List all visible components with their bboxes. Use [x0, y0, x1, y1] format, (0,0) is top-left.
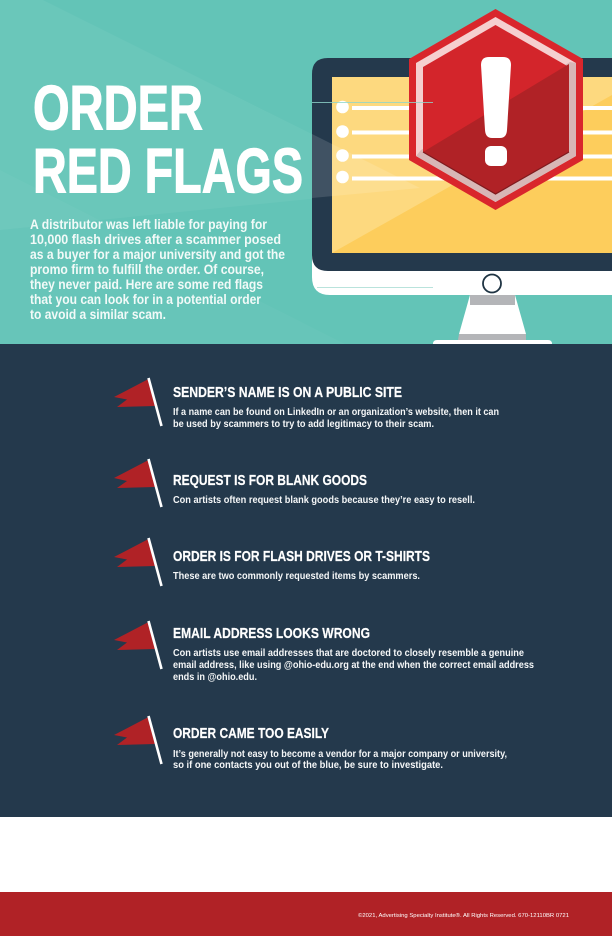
red flag item 2: [114, 459, 475, 507]
intro paragraph: they never paid. Here are some red flags: [30, 277, 263, 292]
body text: If a name can be found on LinkedIn or an organization’s website, then it can: [173, 407, 499, 418]
monitor power button: [483, 274, 501, 292]
footer copyright text: ©2021, Advertising Specialty Institute®. All Rights Reserved. 670-12110BR 0721: [358, 912, 569, 919]
heading: sender's name: SENDER’S NAME IS ON A PUBLIC SITE: [173, 385, 402, 401]
translucent light beam over monitor: [312, 134, 433, 288]
panel: teal hero background: [0, 0, 612, 344]
footer bar: [0, 892, 612, 936]
body text: It’s generally not easy to become a vendor for a major company or university,: [173, 749, 507, 760]
illustration: computer monitor: [312, 58, 612, 344]
intro paragraph: [30, 217, 285, 322]
icon: red flag: [114, 716, 162, 764]
white spacer band: [0, 817, 612, 892]
monitor screen: [332, 77, 612, 253]
intro paragraph: to avoid a similar scam.: [30, 307, 166, 322]
body text: email address, like using @ohio-edu.org at the end when the correct email address: [173, 660, 534, 671]
body text: [173, 749, 507, 771]
intro paragraph: promo firm to fulfill the order. Of course,: [30, 262, 264, 277]
icon: red flag: [114, 378, 162, 426]
monitor stand: [433, 295, 552, 344]
heading: flash drives: ORDER IS FOR FLASH DRIVES OR T-SHIRTS: [173, 549, 430, 565]
intro paragraph: A distributor was left liable for paying for: [30, 217, 268, 232]
body text: be used by scammers to try to add legitimacy to their scam.: [173, 419, 434, 430]
panel: dark navy red flags list: [0, 344, 612, 817]
icon: red flag: [114, 621, 162, 669]
monitor white chin: [312, 240, 612, 295]
title: RED FLAGS: [33, 137, 303, 207]
intro paragraph: as a buyer for a major university and got the: [30, 247, 285, 262]
body text: These are two commonly requested items by scammers.: [173, 571, 420, 582]
body text: ends in @ohio.edu.: [173, 672, 257, 683]
icon: red hexagon warning sign: [409, 9, 583, 210]
monitor dark frame: [312, 58, 612, 271]
icon: red flag: [114, 459, 162, 507]
body text: so if one contacts you out of the blue, be sure to investigate.: [173, 760, 443, 771]
red flag item 5: [114, 716, 507, 771]
thin line across hexagon: [312, 101, 433, 104]
title: [33, 74, 303, 207]
screen list lines: [336, 101, 612, 183]
title: ORDER: [33, 74, 203, 144]
body text: Con artists use email addresses that are doctored to closely resemble a genuine: [173, 648, 524, 659]
heading: blank goods: REQUEST IS FOR BLANK GOODS: [173, 473, 367, 489]
heading: too easily: ORDER CAME TOO EASILY: [173, 726, 329, 742]
intro paragraph: that you can look for in a potential order: [30, 292, 262, 307]
red flag item 3: [114, 538, 430, 586]
body text: [173, 648, 534, 683]
heading: email address: EMAIL ADDRESS LOOKS WRONG: [173, 626, 370, 642]
icon: exclamation mark: [481, 57, 511, 166]
body text: Con artists often request blank goods because they’re easy to resell.: [173, 495, 475, 506]
intro paragraph: 10,000 flash drives after a scammer posed: [30, 232, 281, 247]
icon: red flag: [114, 538, 162, 586]
red flag item 1: [114, 378, 499, 430]
red flag item 4: [114, 621, 534, 683]
body text: [173, 407, 499, 430]
